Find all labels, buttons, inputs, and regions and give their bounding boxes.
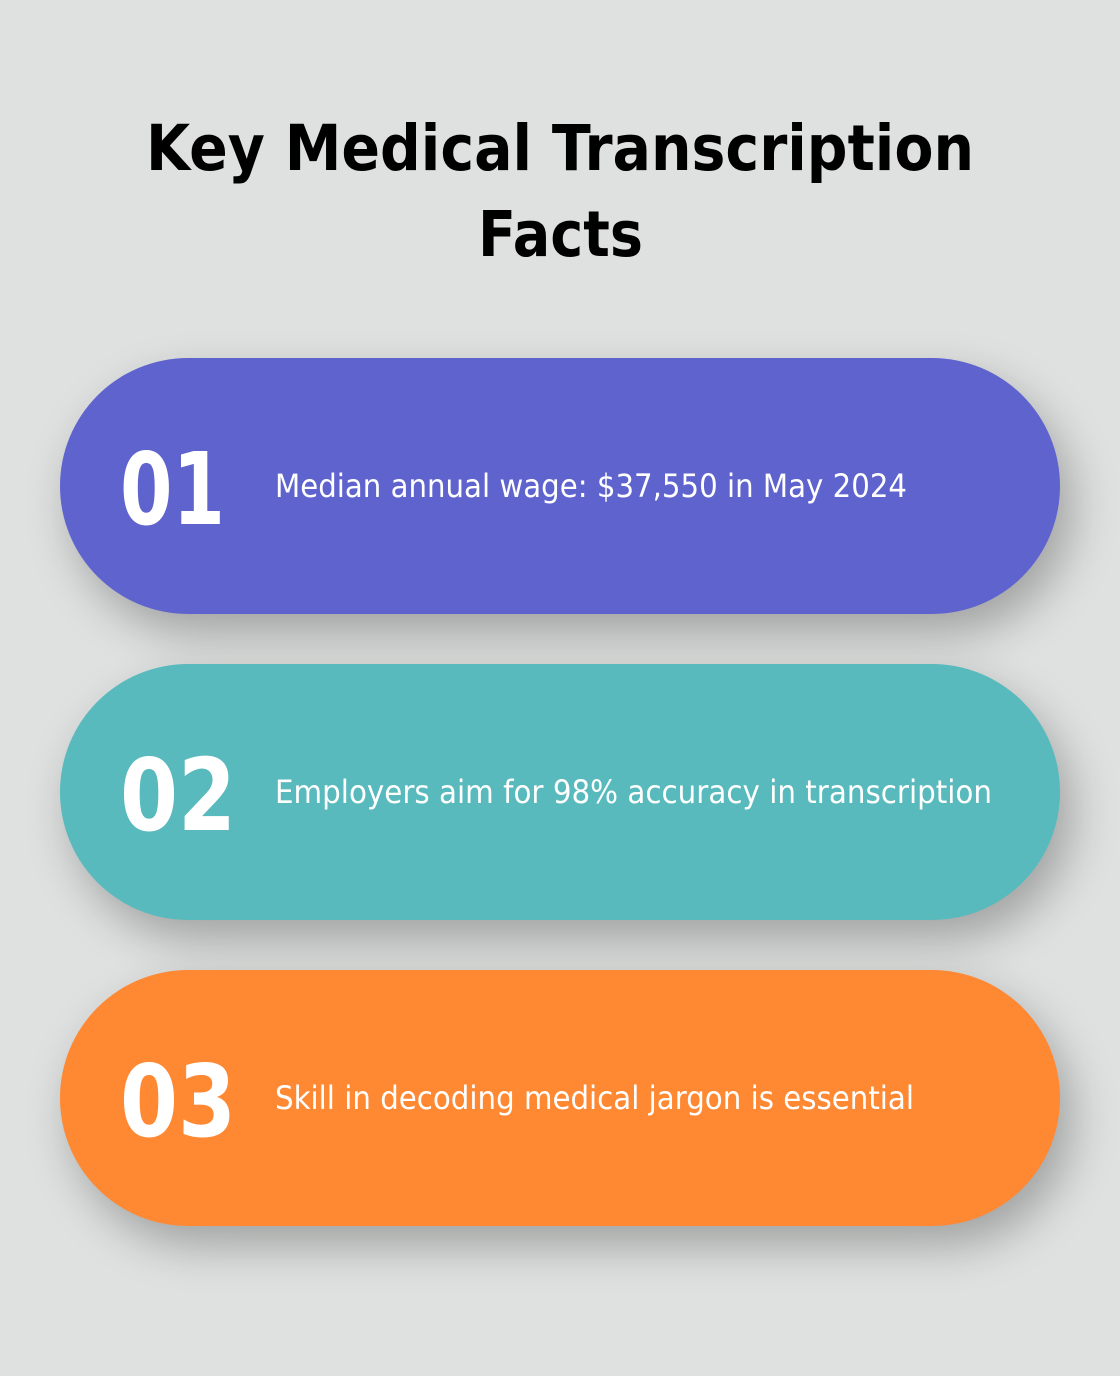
text: medical jargon skill: Skill in decoding medical jargon is essential — [275, 1079, 914, 1117]
text: accuracy target: Employers aim for 98% accuracy in transcription — [275, 773, 992, 811]
number 02: 02 — [120, 737, 236, 854]
title: Facts — [478, 198, 643, 271]
title — [146, 112, 974, 271]
panel: fact 2 pill background — [60, 664, 1060, 920]
text: median annual wage: Median annual wage: $37,550 in May 2024 — [275, 467, 907, 505]
number 01: 01 — [120, 431, 225, 548]
panel: fact 1 pill background — [60, 358, 1060, 614]
panel: fact 3 pill background — [60, 970, 1060, 1226]
number 03: 03 — [120, 1043, 236, 1160]
title: Key Medical Transcription — [146, 112, 974, 185]
